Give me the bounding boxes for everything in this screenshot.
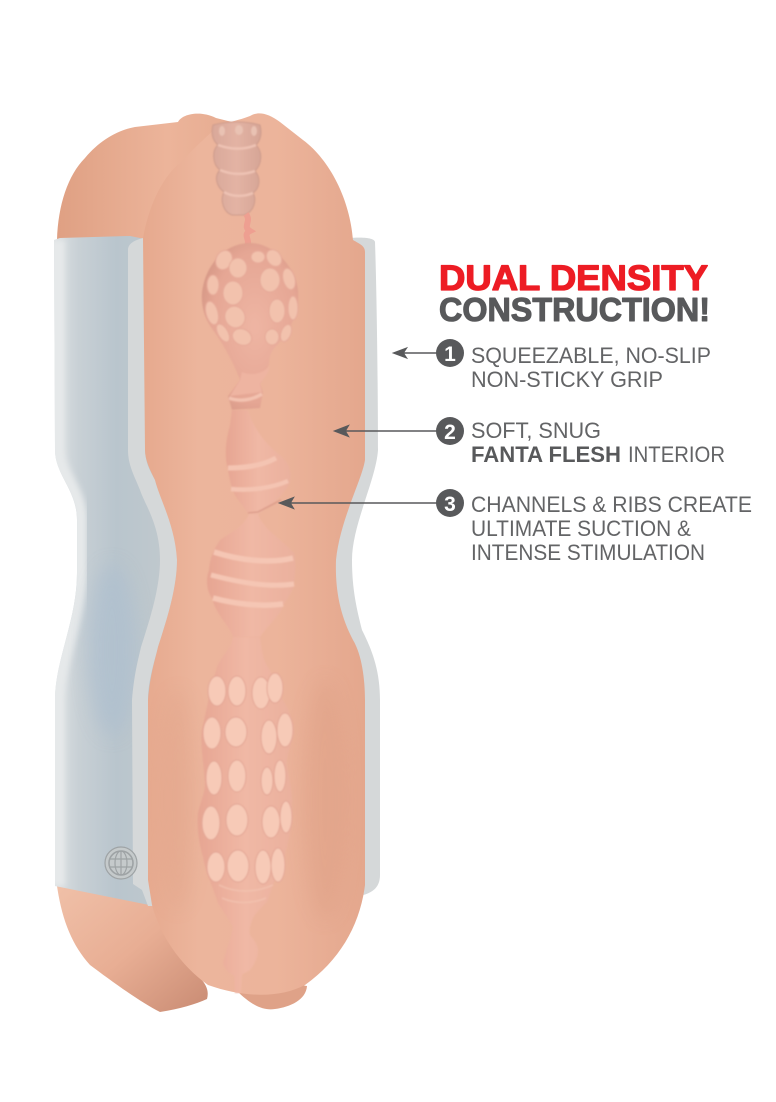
channel, upper bulb [202,243,298,410]
text 3: INTENSE STIMULATION [471,540,705,565]
callout 3: channels [280,489,752,565]
face shading [160,680,347,920]
grey outer sleeve, right [326,238,380,897]
text 2: INTERIOR [628,442,725,467]
text 2: FANTA FLESH [471,442,621,467]
inner sleeve wall, left [128,236,177,906]
number badge 2 [436,417,464,445]
title: DUAL DENSITY [439,259,708,298]
cut face of the inner sleeve [143,113,365,995]
channel, lower nodules [202,673,293,884]
text 3 [471,492,752,565]
number badge 1: 1 [444,343,456,366]
top holes [219,125,257,136]
callout 1: grip [394,339,711,392]
infographic canvas [54,113,752,1012]
arrow 2 [335,426,437,436]
channel, ribbed top section [212,122,261,215]
number badge 1 [436,339,464,367]
back outer skin, bottom [57,886,208,1012]
illustration: dual density product cutaway [54,113,380,1012]
grey outer sleeve, left [54,236,178,907]
channel, lower nodule section [198,637,293,993]
text 1: NON-STICKY GRIP [471,367,663,392]
back outer skin, top [57,114,240,240]
sleeve soft highlight and blue patch [58,240,136,886]
channel, upper bulb nodules [203,247,298,348]
arrow 1 [394,348,437,358]
text 1 [471,343,711,392]
number badge 2: 2 [444,421,456,444]
arrow 3 [280,498,437,508]
channel, neck and ring [229,366,270,400]
title [439,259,710,328]
lower rear lip [236,980,307,1009]
channel, twisted ribbed section [226,410,290,514]
text 2 [471,418,725,467]
title: CONSTRUCTION! [439,291,710,328]
channel, thin twist [246,214,250,246]
text 3: CHANNELS & RIBS CREATE [471,492,752,517]
number badge 3 [436,489,464,517]
logo emblem on sleeve [105,847,137,879]
text 1: SQUEEZABLE, NO-SLIP [471,343,711,368]
number badge 3: 3 [444,493,456,516]
text 3: ULTIMATE SUCTION & [471,516,691,541]
channel, banded section [207,514,296,637]
callout 2: interior [335,417,725,467]
text 2: SOFT, SNUG [471,418,601,443]
